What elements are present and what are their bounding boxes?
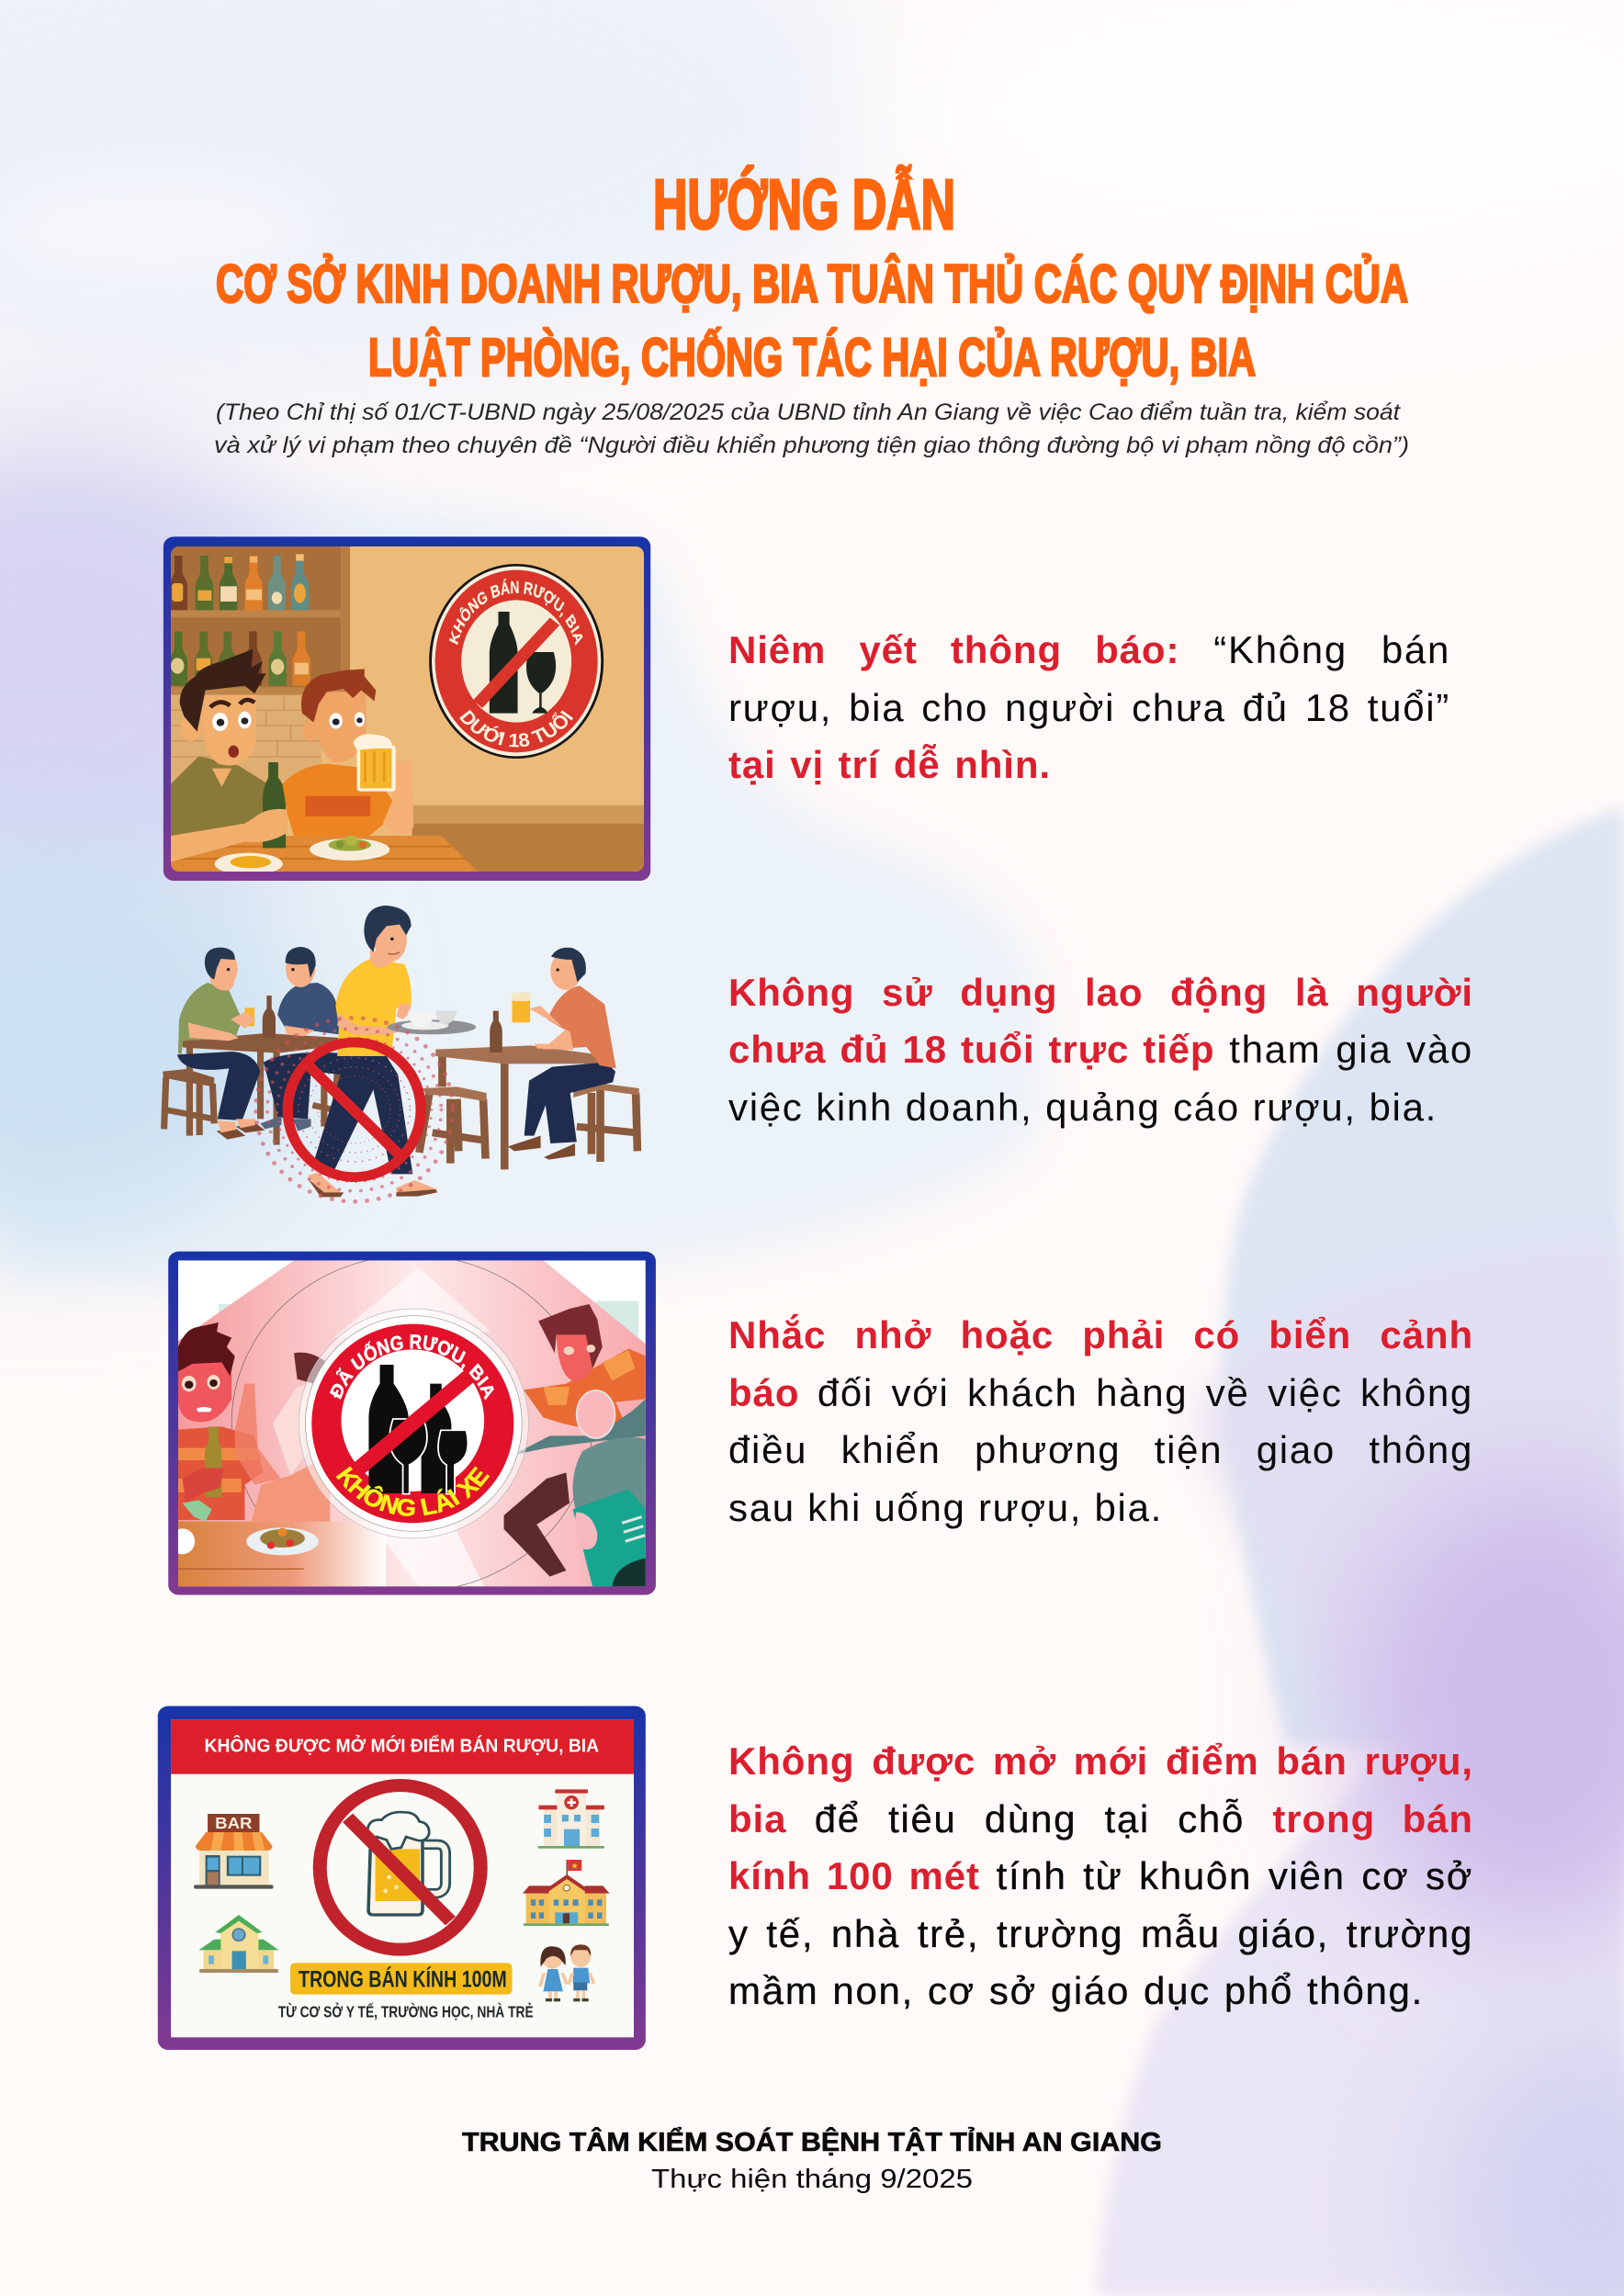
panel: underage waiter illustration [147, 891, 661, 1212]
text block: niêm yết thông báo: tại vị trí dễ nhìn. [728, 743, 1051, 786]
illustration: drunk man at table [178, 1322, 263, 1522]
label: 100m radius [290, 1963, 513, 1995]
icon: school [523, 1860, 610, 1926]
banner: header: KHÔNG ĐƯỢC MỞ MỚI ĐIỂM BÁN RƯỢU, BIA [204, 1735, 599, 1756]
icon: bar: BAR [215, 1815, 252, 1832]
illustration: man in blue shirt [260, 947, 341, 1131]
illustration: boy with beer [283, 669, 413, 836]
icon: no sale sign [429, 564, 604, 759]
text block: nhắc nhở khách hàng: điều khiển phương tiện giao thông [728, 1428, 1473, 1471]
icon: children [540, 1944, 593, 2001]
heading: HƯỚNG DẪN: HƯỚNG DẪN [653, 164, 955, 244]
text block: không được mở mới [728, 1733, 1473, 2020]
illustration: second man [235, 1353, 330, 1522]
text block: không sử dụng lao động: việc kinh doanh, quảng cáo rượu, bia. [728, 1086, 1438, 1128]
illustration: waiter with tray [308, 906, 476, 1197]
icon: bar [194, 1814, 274, 1889]
footer [441, 2112, 1176, 2204]
icon: no beer sign [320, 1785, 480, 1950]
text block: niêm yết thông báo [728, 622, 1450, 793]
icon: hospital [538, 1789, 604, 1849]
text block: không được mở mới: bia để tiêu dùng tại chỗ trong bán [728, 1796, 1473, 1840]
text block: nhắc nhở khách hàng: Nhắc nhở hoặc phải có biển cảnh [728, 1313, 1473, 1356]
icon: kindergarten [198, 1915, 279, 1973]
text block: không được mở mới: mầm non, cơ sở giáo dục phổ thông. [728, 1969, 1424, 2012]
icon: no sale sign: KHÔNG BÁN RƯỢU, BIA [448, 579, 582, 646]
text block: nhắc nhở khách hàng [728, 1307, 1473, 1536]
icon: school: ★ [571, 1862, 579, 1871]
panel: 100 m radius rule illustration [147, 1690, 661, 2057]
illustration: stools and left table [163, 1033, 341, 1145]
decoration: dotted pulse rings [256, 1018, 453, 1201]
icon: no sale sign: DƯỚI 18 TUỔI [459, 709, 573, 748]
text block: niêm yết thông báo: Niêm yết thông báo: “Không bán [728, 628, 1450, 671]
icon: no drink driving sign: KHÔNG LÁI XE [336, 1466, 491, 1516]
illustration: bottle on left table [263, 996, 276, 1038]
illustration: table and salad plate [170, 1522, 386, 1586]
icon: no drink driving sign: ĐÃ UỐNG RƯỢU, BIA [329, 1334, 494, 1401]
icon: prohibition sign [288, 1042, 421, 1177]
subtitle line 2: và xử lý vi phạm theo chuyên đề “Người điều khiển phương tiện giao thông đường bộ vi phạm nồng độ cồn”) [214, 433, 1409, 458]
illustration: man on scooter [504, 1304, 646, 1586]
text block: không sử dụng lao động: chưa đủ 18 tuổi trực tiếp tham gia vào [728, 1028, 1473, 1071]
label: distance note: TỪ CƠ SỞ Y TẾ, TRƯỜNG HỌC, NHÀ TRẺ [278, 2002, 534, 2021]
text block: nhắc nhở khách hàng: sau khi uống rượu, bia. [728, 1486, 1163, 1528]
text block: không sử dụng lao động [728, 964, 1473, 1136]
panel: no sale to under 18 illustration [164, 536, 650, 881]
icon: no drink driving sign [299, 1309, 528, 1538]
label: 100m radius: TRONG BÁN KÍNH 100M [299, 1965, 507, 1992]
text block: không được mở mới: y tế, nhà trẻ, trường mẫu giáo, trường [728, 1912, 1473, 1954]
text block: không sử dụng lao động: Không sử dụng lao động là người [728, 970, 1473, 1014]
text block: nhắc nhở khách hàng: báo đối với khách hàng về việc không [728, 1370, 1473, 1414]
heading line 3: LUẬT PHÒNG, CHỐNG TÁC HẠI CỦA RƯỢU, BIA [368, 328, 1256, 388]
illustration: right table and man [419, 948, 639, 1169]
text block: niêm yết thông báo: rượu, bia cho người chưa đủ 18 tuổi” [728, 685, 1450, 729]
subtitle line 1: (Theo Chỉ thị số 01/CT-UBND ngày 25/08/2025 của UBND tỉnh An Giang về việc Cao điểm tuần tra, kiểm soát [216, 400, 1401, 425]
title block [214, 163, 1409, 458]
illustration: man in green shirt [177, 948, 265, 1140]
text block: không được mở mới: Không được mở mới điểm bán rượu, [728, 1739, 1473, 1783]
footer: date: Thực hiện tháng 9/2025 [651, 2165, 973, 2194]
panel: no driving after drinking illustration [168, 1251, 656, 1595]
illustration: table and plates [171, 836, 478, 872]
text block: không được mở mới: kính 100 mét tính từ khuôn viên cơ sở [728, 1854, 1473, 1897]
illustration: man with bottle [171, 649, 288, 861]
banner: header [171, 1719, 634, 1774]
footer: organisation: TRUNG TÂM KIỂM SOÁT BỆNH TẬT TỈNH AN GIANG [462, 2126, 1162, 2157]
